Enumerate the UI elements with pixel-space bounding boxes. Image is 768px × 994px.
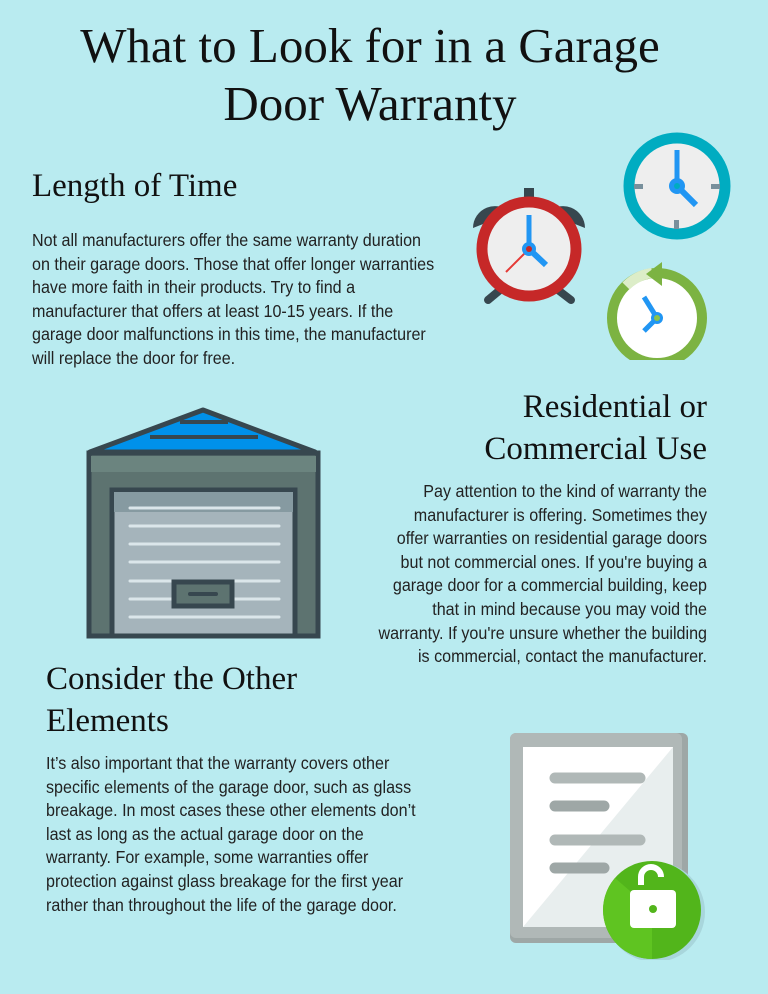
text: other elements: warranty. For example, some warranties offer [46, 847, 368, 867]
title: Door Warranty [223, 76, 517, 131]
icon: document with lock [510, 733, 705, 960]
text: residential or commercial: that in mind because you may void the [432, 599, 707, 619]
text: residential or commercial: but not commercial ones. If you're buying a [401, 552, 707, 572]
text: residential or commercial: offer warranties on residential garage doors [397, 528, 707, 548]
text: length of time [32, 230, 434, 368]
text: residential or commercial: manufacturer is offering. Sometimes they [414, 505, 707, 525]
heading: consider the other elements: Consider the Other [46, 661, 297, 697]
text: other elements: rather than throughout the life of the garage door. [46, 895, 397, 915]
heading: consider the other elements [46, 661, 297, 739]
text: residential or commercial: warranty. If you're unsure whether the building [378, 623, 707, 643]
text: other elements: breakage. In most cases these other elements don’t [46, 800, 416, 820]
text: length of time: Not all manufacturers offer the same warranty duration [32, 230, 421, 250]
heading: consider the other elements: Elements [46, 703, 169, 739]
text: residential or commercial: Pay attention to the kind of warranty the [423, 481, 707, 501]
icon: alarm clock [473, 188, 585, 300]
title [80, 18, 660, 131]
icon: garage [86, 408, 320, 638]
text: length of time: on their garage doors. Those that offer longer warranties [32, 254, 434, 274]
text: residential or commercial: garage door for a commercial building, keep [393, 575, 707, 595]
heading: length of time: Length of Time [32, 168, 237, 204]
text: other elements: specific elements of the garage door, such as glass [46, 777, 411, 797]
text: length of time: have more faith in their products. Try to find a [32, 277, 355, 297]
text: other elements: protection against glass breakage for the first year [46, 871, 403, 891]
text: length of time: garage door malfunctions in this time, the manufacturer [32, 324, 426, 344]
icon: green refresh clock [612, 262, 702, 363]
text: length of time: will replace the door for free. [32, 348, 235, 368]
heading: residential or commercial: Residential or [523, 389, 707, 425]
text: residential or commercial [378, 481, 707, 666]
text: residential or commercial: is commercial, contact the manufacturer. [418, 646, 707, 666]
text: other elements: It’s also important that the warranty covers other [46, 753, 389, 773]
text: other elements [46, 753, 416, 915]
text: other elements: last as long as the actual garage door on the [46, 824, 364, 844]
text: length of time: manufacturer that offers at least 10-15 years. If the [32, 301, 393, 321]
heading: residential or commercial [484, 389, 707, 467]
icons: clocks [473, 132, 730, 360]
icon: teal clock [629, 138, 725, 234]
title: What to Look for in a Garage [80, 18, 660, 73]
heading: residential or commercial: Commercial Use [484, 431, 707, 467]
